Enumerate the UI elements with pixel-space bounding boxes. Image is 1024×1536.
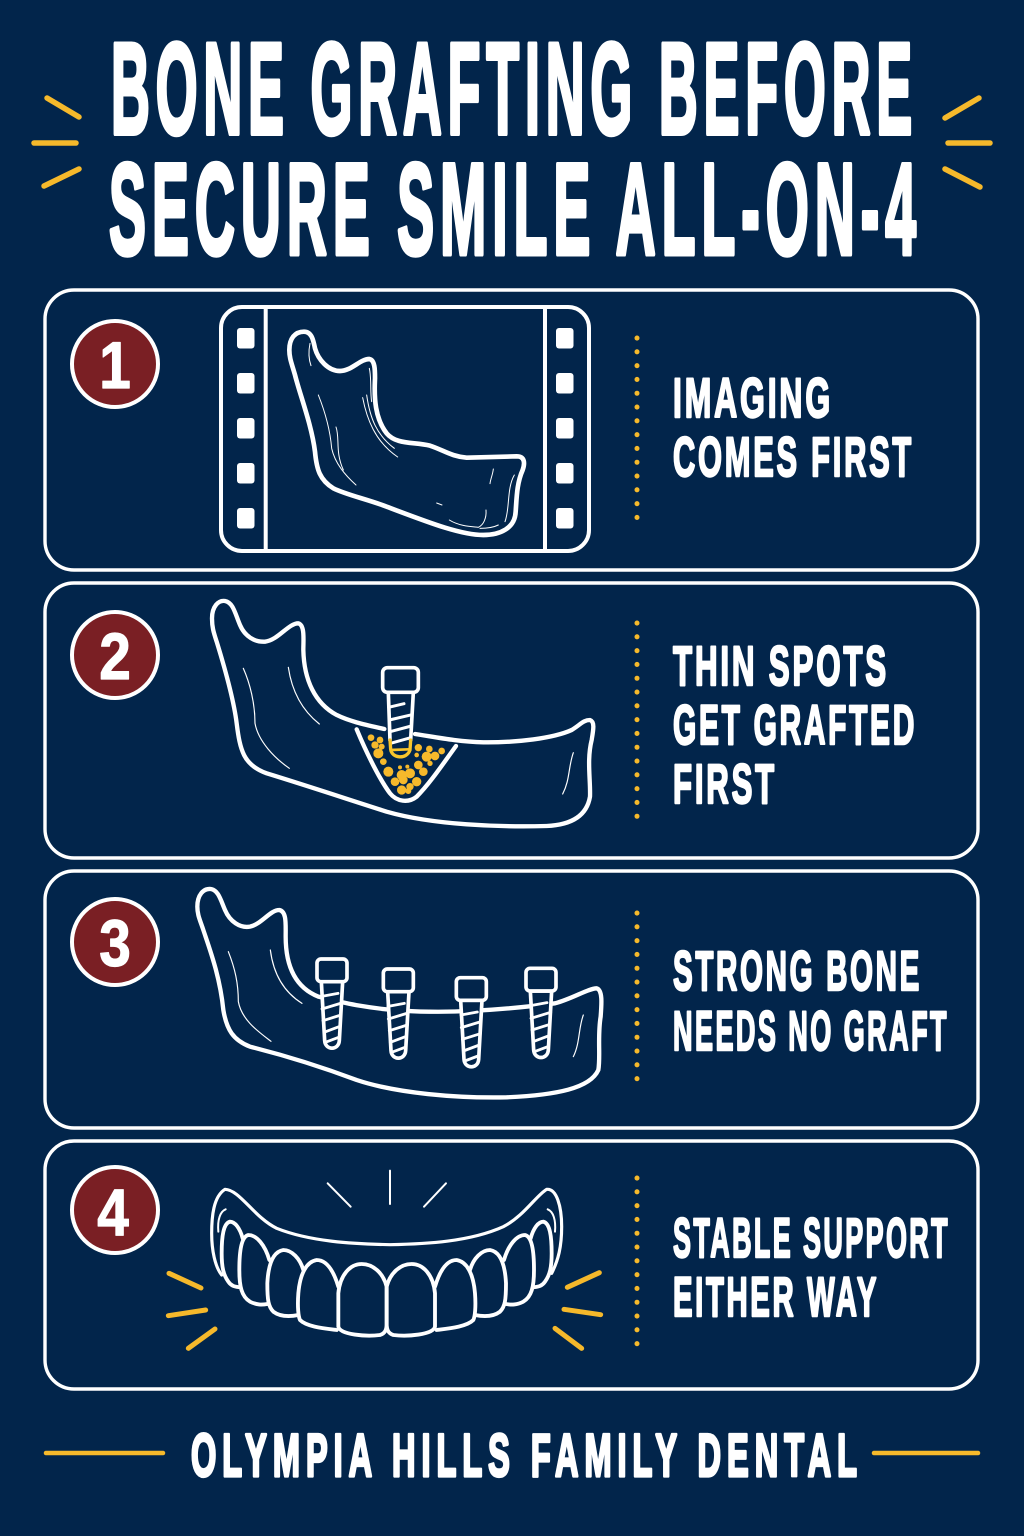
left teeth	[218, 1209, 387, 1336]
right teeth	[387, 1209, 555, 1336]
white shine rays	[328, 1171, 446, 1207]
step 3 label	[673, 939, 949, 1062]
step 3 badge	[72, 899, 158, 985]
panel 3 border	[45, 871, 978, 1128]
dotted divider 2	[634, 623, 640, 818]
yellow shine rays	[168, 1273, 601, 1348]
dotted divider 4	[634, 1178, 640, 1345]
gum arc	[212, 1189, 562, 1275]
title	[109, 16, 922, 282]
icon: left title sparkle	[34, 98, 79, 186]
step 2 badge: 2	[99, 620, 131, 694]
step 4 label	[673, 1206, 950, 1328]
icon: jaw with four implants	[197, 889, 601, 1097]
panel: step 4 stable support	[45, 1141, 978, 1389]
icon: film strip with jaw x-ray	[221, 307, 589, 551]
panel: step 1 imaging	[45, 290, 978, 570]
dotted divider 1	[634, 338, 640, 518]
panel 1 border	[45, 290, 978, 570]
icon: jaw with graft and implant	[212, 601, 593, 826]
panel: step 3 strong bone	[45, 871, 978, 1128]
panel 4 border	[45, 1141, 978, 1389]
step 2 label: FIRST	[673, 752, 777, 815]
icon: smile with denture arch	[168, 1171, 601, 1348]
icon: right title sparkle	[945, 98, 990, 187]
step 1 label: IMAGING	[673, 366, 833, 429]
footer left rule	[46, 1451, 163, 1455]
panel: step 2 grafting	[45, 583, 978, 858]
panel 2 border	[45, 583, 978, 858]
step 4 badge	[72, 1167, 158, 1253]
step 1 badge: 1	[99, 329, 131, 403]
step 4 badge: 4	[97, 1176, 129, 1250]
step 2 label	[673, 634, 917, 815]
step 2 badge	[72, 612, 158, 698]
step 3 badge: 3	[99, 907, 131, 981]
step 1 badge	[72, 321, 158, 407]
dotted divider 3	[634, 913, 640, 1082]
step 1 label	[673, 366, 914, 488]
footer right rule	[874, 1451, 978, 1455]
